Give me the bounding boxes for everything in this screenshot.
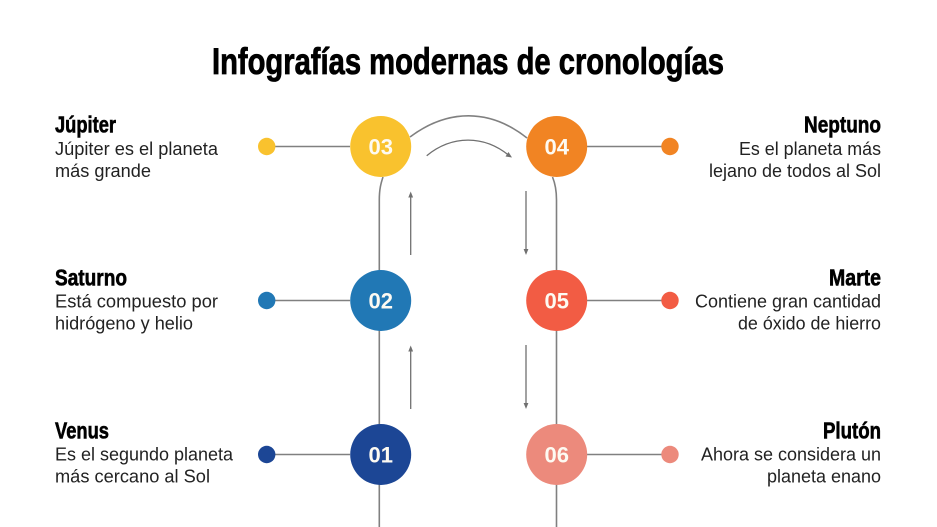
node 05: 05 <box>544 288 569 314</box>
arrow: up from 02 to 03 <box>408 192 413 255</box>
text block: Neptuno <box>709 112 881 181</box>
dot: Plutón <box>661 446 679 463</box>
node 04 <box>526 116 587 177</box>
text block: Marte: Contiene gran cantidad <box>695 292 881 312</box>
dot: Neptuno <box>661 138 679 155</box>
text block: Saturno: hidrógeno y helio <box>55 314 193 334</box>
timeline path <box>275 116 662 527</box>
text block: Saturno <box>55 264 218 334</box>
dot: Venus <box>258 446 275 463</box>
text block: Júpiter: más grande <box>55 161 151 181</box>
text block: Plutón <box>701 418 881 486</box>
node 04: 04 <box>544 134 570 160</box>
node 02: 02 <box>368 288 393 314</box>
title: Infografías modernas de cronologías <box>212 41 724 82</box>
text block: Marte <box>695 264 881 334</box>
node 01 <box>350 424 411 485</box>
dot: Marte <box>661 292 679 309</box>
text block: Venus: más cercano al Sol <box>55 466 210 486</box>
node 02 <box>350 270 411 331</box>
text block: Venus: Venus <box>55 418 109 444</box>
node 05 <box>526 270 587 331</box>
text block: Plutón: Ahora se considera un <box>701 444 881 464</box>
text block: Plutón: planeta enano <box>767 466 881 486</box>
node 03 <box>350 116 411 177</box>
node 06 <box>526 424 587 485</box>
text block: Venus <box>55 418 234 486</box>
text block: Júpiter: Júpiter <box>55 112 116 138</box>
arrow: down from 05 to 06 <box>524 345 528 409</box>
node 06: 06 <box>544 442 569 468</box>
arrow: down from 04 to 05 <box>524 191 528 255</box>
node 03: 03 <box>368 134 393 160</box>
text block: Neptuno: Es el planeta más <box>739 139 881 159</box>
text block: Júpiter <box>55 112 219 181</box>
node 01: 01 <box>368 442 393 468</box>
text block: Venus: Es el segundo planeta <box>55 444 234 464</box>
dot: Júpiter <box>258 138 275 155</box>
text block: Saturno: Está compuesto por <box>55 292 218 312</box>
text block: Neptuno: lejano de todos al Sol <box>709 161 881 181</box>
text block: Marte: Marte <box>829 264 881 290</box>
arrow: up from 01 to 02 <box>408 346 413 409</box>
text block: Saturno: Saturno <box>55 264 127 290</box>
text block: Neptuno: Neptuno <box>804 112 881 138</box>
dot: Saturno <box>258 292 275 309</box>
text block: Marte: de óxido de hierro <box>738 314 881 334</box>
text block: Júpiter: Júpiter es el planeta <box>55 139 219 159</box>
text block: Plutón: Plutón <box>823 418 881 444</box>
arrow: curved top <box>427 140 512 158</box>
